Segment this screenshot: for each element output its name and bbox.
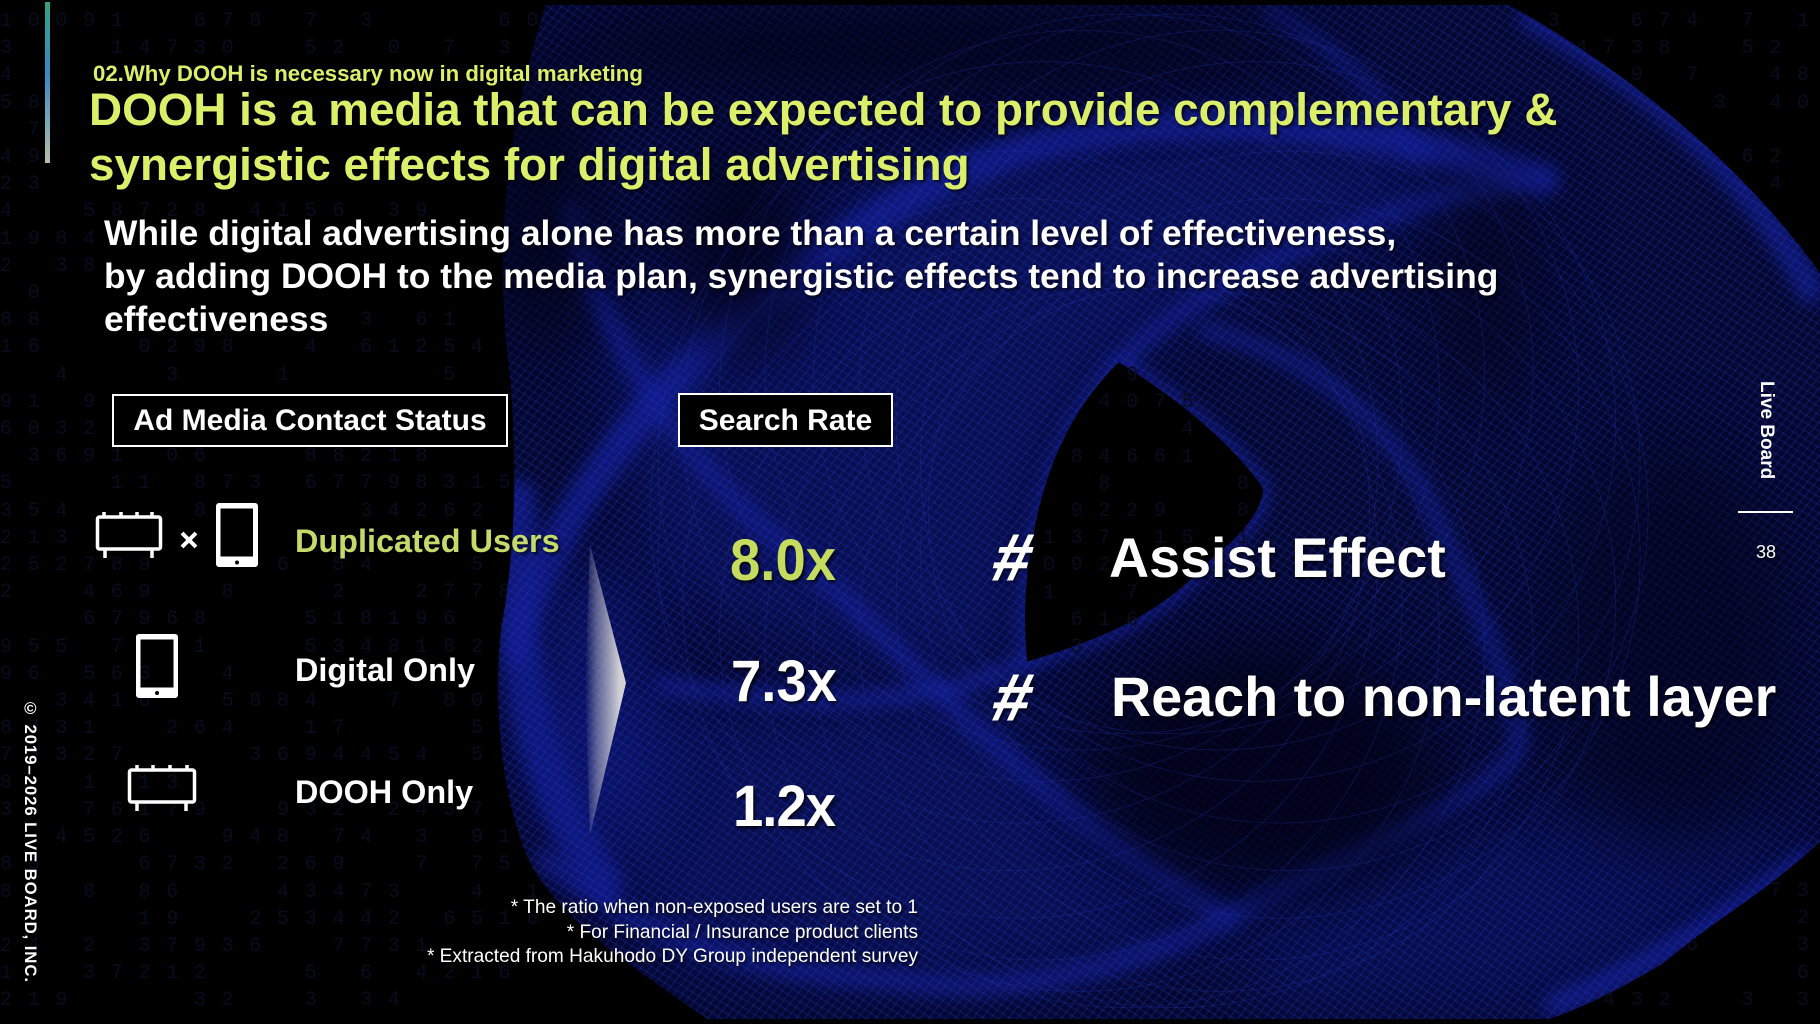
hash mark 1: # — [985, 520, 1040, 594]
copyright vertical: © 2019–2026 LIVE BOARD, INC. — [21, 699, 40, 983]
page number: 38 — [1756, 542, 1776, 562]
intro text: effectiveness — [104, 299, 328, 339]
icon: billboard — [128, 765, 196, 811]
header: ad media contact status: Ad Media Contact Status — [133, 404, 487, 437]
hash mark 2: # — [985, 660, 1040, 734]
background digit rain: left column: 1 0 0 9 1 6 7 8 7 3 6 0 3 1 4 7 3 0 5 2 0 7 3 4 5 8 7 4 9 2 3 4 5 8 7 2 8 4 1 5 6 3 9 1 9 8 4 2 3 8 0 8 8 3 6 1 1 6 0 2 9 8 4 6 1 2 5 4 4 3 1 5 9 1 9 6 0 3 2 3 6 9 1 0 6 8 8 2 1 8 5 1 1 8 7 3 6 7 7 9 8 3 1 5 3 5 4 8 3 4 2 6 2 2 1 3 2 5 2 7 8 9 6 5 4 5 2 4 6 9 8 2 2 7 7 8 6 7 9 6 8 5 1 8 1 9 6 1 9 5 5 7 1 5 3 4 8 1 8 2 9 6 5 6 3 4 3 4 1 6 5 8 8 4 7 8 0 8 8 7 3 1 2 6 4 1 7 5 7 3 3 2 7 3 6 9 4 4 5 4 5 8 1 1 3 3 7 6 1 7 9 9 3 2 2 4 3 7 4 5 2 6 9 4 8 7 4 3 9 1 9 8 5 6 7 3 2 2 6 9 7 7 5 8 8 8 6 4 3 4 7 3 4 1 1 9 2 5 3 4 4 2 6 5 1 6 2 4 2 3 7 9 3 6 7 7 3 1 1 3 7 2 1 2 5 6 4 2 1 6 2 1 9 3 2 3 3 4 — [0, 10, 540, 1012]
header: ad media contact status — [112, 394, 508, 447]
background digit rain: top right: 3 6 7 4 7 1 4 7 3 8 5 2 9 7 4 8 3 4 0 6 2 4 — [1520, 10, 1811, 196]
page divider — [1738, 511, 1793, 513]
title: DOOH is a media that can be expected to provide complementary & — [89, 84, 1557, 135]
header: search rate: Search Rate — [699, 404, 872, 436]
label: duplicated users: Duplicated Users — [295, 523, 560, 559]
label: dooh only: DOOH Only — [295, 774, 473, 810]
brand vertical: Live Board — [1756, 381, 1777, 479]
footnotes: * The ratio when non-exposed users are set to 1 — [511, 897, 918, 918]
footnotes — [427, 897, 922, 970]
background digit rain: centre opening: 9 4 0 7 5 4 8 4 6 6 1 8 8 9 2 2 9 8 1 3 7 1 5 1 0 9 2 1 7 6 1 6 3 — [1043, 364, 1251, 659]
title: synergistic effects for digital advertising — [89, 139, 970, 190]
intro text: by adding DOOH to the media plan, synergistic effects tend to increase advertising — [104, 256, 1498, 296]
icon: billboard and smartphone — [96, 503, 258, 567]
intro text — [104, 213, 1500, 339]
background digit rain: bottom right: 7 3 2 6 3 6 4 3 2 3 3 — [1520, 880, 1811, 1012]
value: 1.2x: 1.2x — [733, 773, 835, 839]
accent bar — [45, 2, 50, 163]
section label: 02.Why DOOH is necessary now in digital marketing — [93, 61, 643, 86]
arrow: chevron — [586, 546, 626, 834]
title — [89, 84, 1559, 194]
intro text: While digital advertising alone has more than a certain level of effectiveness, — [104, 213, 1396, 253]
value: 8.0x: 8.0x — [730, 527, 836, 593]
icon: smartphone — [136, 634, 178, 698]
header: search rate — [678, 393, 893, 447]
effect: reach to non-latent layer: Reach to non-latent layer — [1111, 666, 1776, 728]
footnotes: * For Financial / Insurance product clients — [567, 922, 918, 942]
effect: assist effect: Assist Effect — [1109, 527, 1446, 589]
label: digital only: Digital Only — [295, 652, 475, 688]
value: 7.3x: 7.3x — [731, 648, 837, 714]
footnotes: * Extracted from Hakuhodo DY Group independent survey — [427, 946, 918, 967]
